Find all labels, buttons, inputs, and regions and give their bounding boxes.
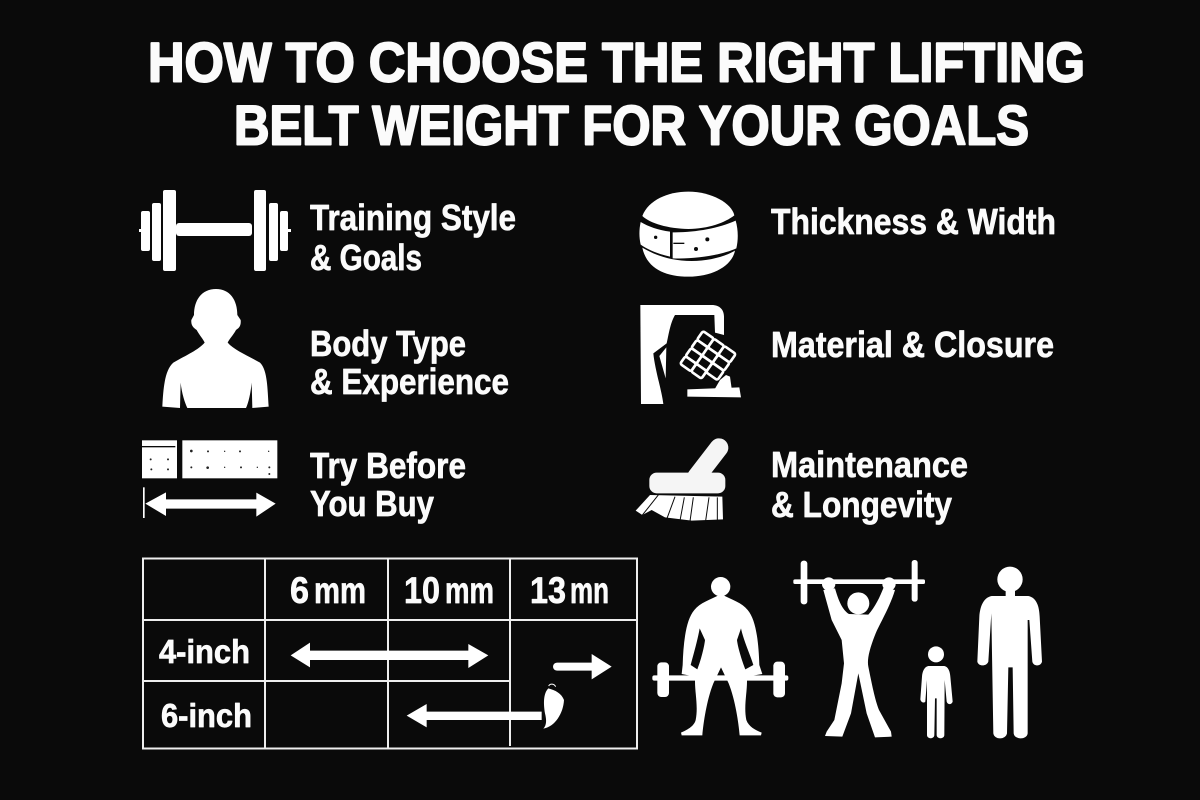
arrow: 6-inch range (407, 704, 542, 727)
icon: material and closure (640, 305, 741, 404)
column header: 10 mm: mm (445, 570, 494, 611)
arrow: right (553, 654, 612, 679)
label: material and closure: Material & Closure (771, 324, 1054, 365)
row header: 6-inch: 6-inch (161, 697, 252, 734)
figures: lifters and body sizes (652, 560, 1042, 738)
column header: 6 mm: 6 (290, 570, 309, 611)
label: maintenance and longevity: & Longevity (771, 484, 952, 525)
label: training style: Training Style (310, 197, 516, 238)
icon: cleaning brush (636, 448, 725, 521)
label: try before you buy: Try Before (310, 445, 466, 486)
column header: 6 mm (290, 570, 366, 611)
icon: body bust (162, 289, 269, 408)
icon: dumbbell (139, 190, 291, 271)
label: training style (310, 197, 516, 278)
label: try before you buy (310, 445, 466, 524)
figure: overhead press (793, 560, 925, 737)
column header: 10 mm (404, 570, 494, 611)
column header: 13 mn (530, 570, 609, 611)
label: body type: & Experience (310, 361, 509, 402)
column header: 13 mn: 13 (530, 570, 566, 611)
label: body type: Body Type (310, 323, 466, 364)
title: BELT WEIGHT FOR YOUR GOALS (234, 94, 1029, 156)
figure: deadlift (652, 577, 788, 735)
figure: child (920, 646, 953, 738)
icon: chili marker (543, 684, 564, 729)
label: try before you buy: You Buy (310, 483, 434, 524)
row header: 4-inch: 4-inch (159, 633, 250, 670)
column header: 6 mm: mm (314, 570, 366, 611)
label: maintenance and longevity: Maintenance (771, 444, 968, 485)
icon: belt thickness (639, 192, 738, 277)
label: maintenance and longevity (771, 444, 968, 525)
table: belt width by thickness (143, 558, 637, 749)
label: body type (310, 323, 509, 402)
title: HOW TO CHOOSE THE RIGHT LIFTING (148, 30, 1085, 94)
title (148, 30, 1085, 156)
label: training style: & Goals (310, 237, 422, 278)
icon: belt sizing (142, 440, 277, 518)
figure: adult (977, 567, 1042, 738)
column header: 13 mn: mn (570, 570, 609, 611)
column header: 10 mm: 10 (404, 570, 440, 611)
arrow: 4-inch range (291, 643, 488, 668)
label: thickness and width: Thickness & Width (771, 201, 1056, 242)
